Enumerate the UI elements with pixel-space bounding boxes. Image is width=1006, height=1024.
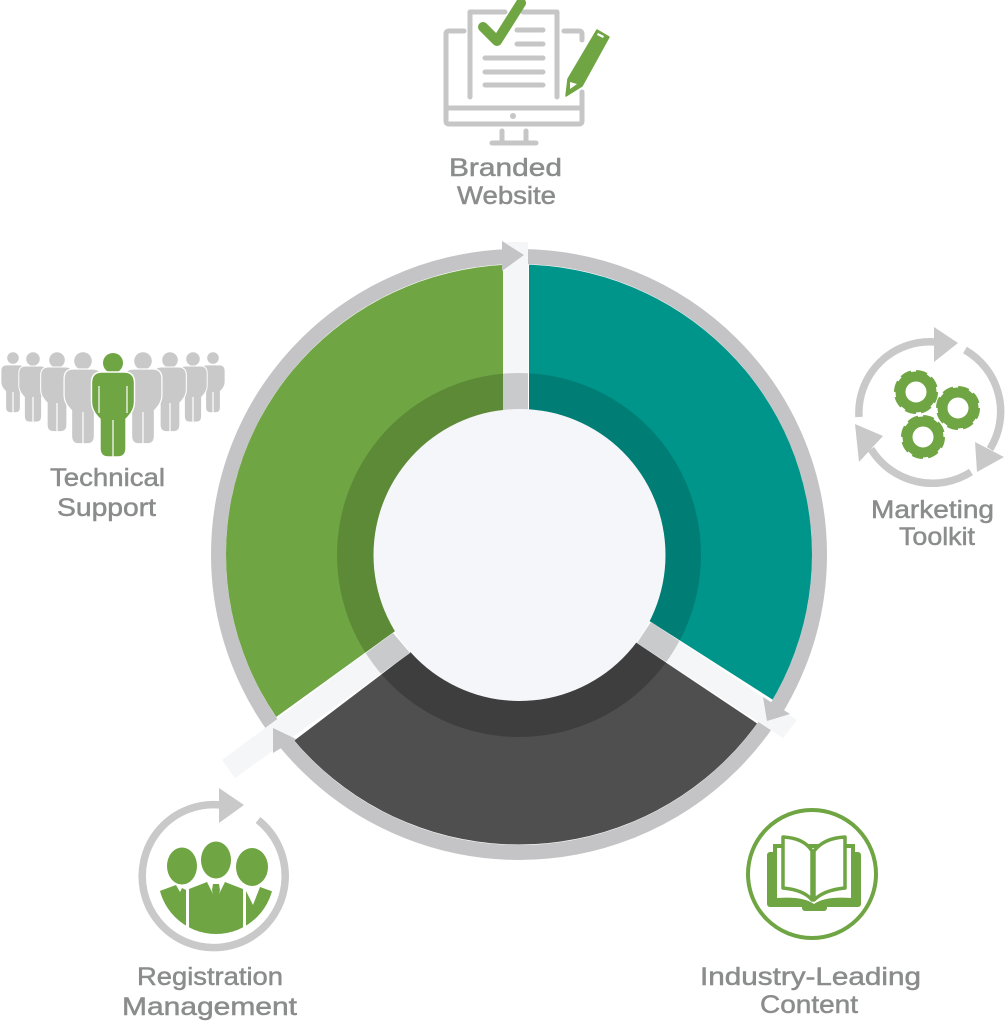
darker inner band — [337, 374, 701, 737]
gray spoke inner sections — [366, 373, 680, 674]
donut wheel — [211, 241, 827, 860]
label: Registration Management — [122, 963, 297, 1021]
icon: branded website — [446, 3, 609, 143]
arrowheads on ring — [273, 241, 790, 753]
cycle arrows — [859, 342, 1001, 483]
light spokes — [222, 242, 797, 778]
label: Technical Support: Technical — [50, 464, 165, 492]
circle outline — [748, 810, 876, 938]
gray leg separators — [13, 392, 213, 444]
icon: marketing toolkit — [855, 327, 1004, 483]
pencil — [566, 30, 609, 96]
label: Technical Support — [50, 464, 165, 522]
label: Registration Management: Management — [122, 993, 297, 1021]
label: Marketing Toolkit: Toolkit — [899, 523, 975, 551]
label: Technical Support: Support — [57, 494, 156, 522]
book cover — [767, 844, 861, 911]
open pages — [783, 837, 845, 900]
teal segment — [529, 264, 812, 700]
icon: registration management — [142, 788, 285, 948]
monitor — [446, 12, 582, 143]
icon: technical support crowd — [1, 352, 225, 457]
label: Industry-Leading Content: Industry-Leading — [700, 963, 921, 991]
circular arrow — [142, 805, 285, 948]
green person — [92, 353, 134, 457]
label: Registration Management: Registration — [137, 963, 283, 991]
three business people — [160, 842, 272, 934]
label: Branded Website: Branded — [449, 154, 562, 182]
gears — [896, 372, 978, 458]
center circle — [374, 409, 666, 701]
label: Branded Website: Website — [457, 182, 556, 210]
dark gray segment — [294, 642, 757, 844]
inner page block — [777, 848, 851, 904]
label: Marketing Toolkit: Marketing — [871, 496, 994, 524]
green segment — [226, 265, 503, 717]
label: Marketing Toolkit — [871, 496, 994, 551]
label: Industry-Leading Content: Content — [760, 991, 858, 1019]
gray people — [1, 352, 225, 444]
check mark — [483, 3, 521, 41]
outer gray ring — [218, 256, 820, 852]
label: Industry-Leading Content — [700, 963, 921, 1019]
icon: industry-leading content book — [748, 810, 876, 938]
label: Branded Website — [449, 154, 562, 210]
